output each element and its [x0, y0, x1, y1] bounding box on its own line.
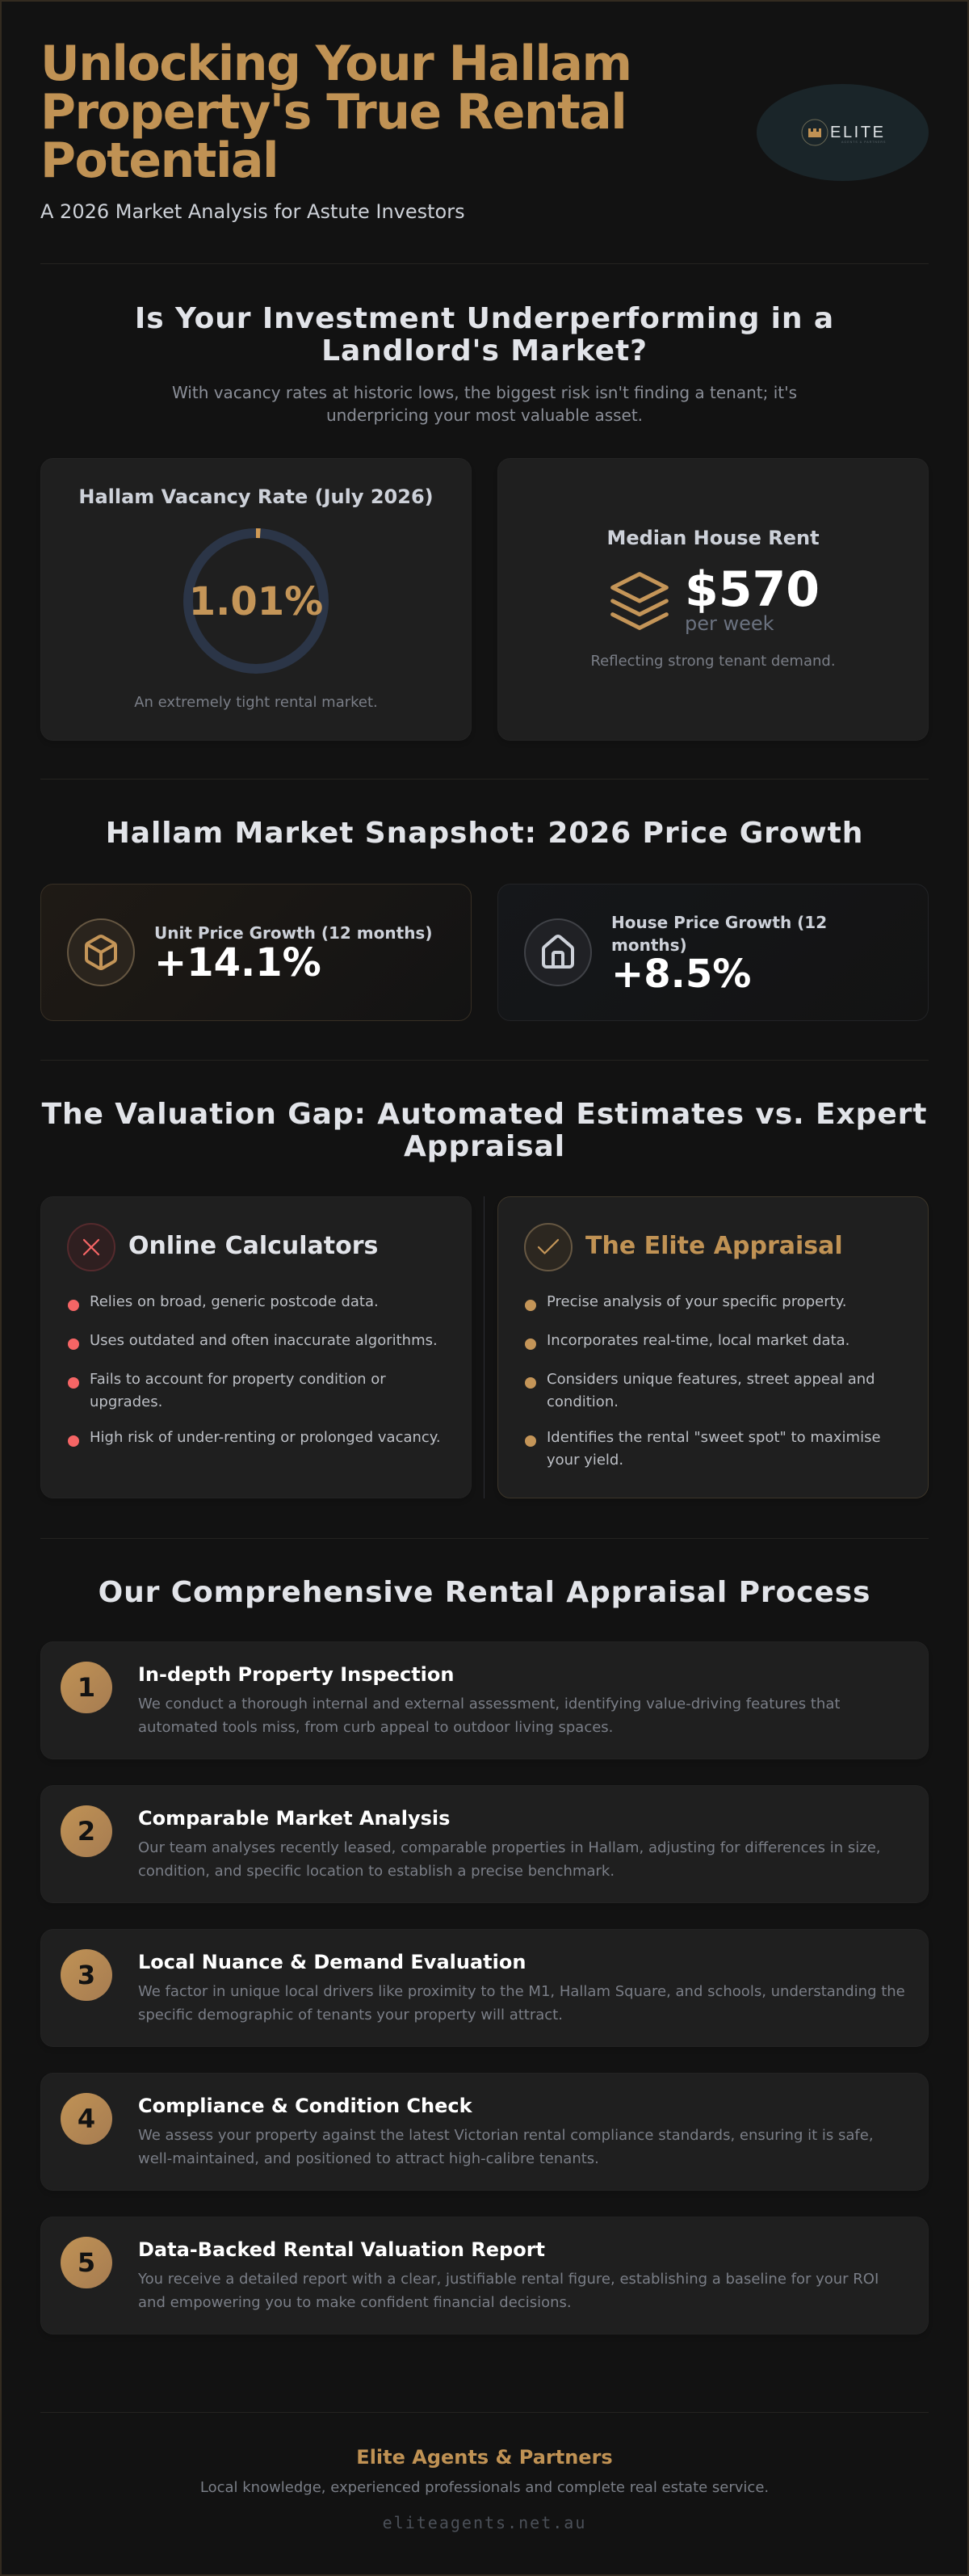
panel: online calculators: [40, 1196, 472, 1498]
icon: check: [524, 1223, 573, 1271]
step title: Compliance & Condition Check: [138, 2095, 472, 2117]
title: Potential: [40, 132, 278, 189]
appraisal heading: The Elite Appraisal: [585, 1232, 843, 1260]
appraisal list: condition.: [547, 1393, 619, 1410]
calculators heading: Online Calculators: [128, 1232, 378, 1260]
panel: house growth: [497, 884, 929, 1021]
title: Unlocking Your Hallam: [40, 36, 631, 92]
heading: valuation gap: Appraisal: [404, 1130, 565, 1163]
step description: [138, 2271, 879, 2311]
calculators list: [68, 1293, 441, 1447]
step 5: [40, 2217, 929, 2334]
logo badge: AGENTS & PARTNERS: [841, 141, 886, 144]
step description: Our team analyses recently leased, comparable properties in Hallam, adjusting for differences in size,: [138, 1839, 880, 1856]
step description: We factor in unique local drivers like proximity to the M1, Hallam Square, and schools, understanding the: [138, 1983, 905, 2000]
appraisal list: [525, 1293, 881, 1469]
unit value: +14.1%: [154, 940, 321, 985]
house label: House Price Growth (12: [611, 913, 827, 932]
step title: In-depth Property Inspection: [138, 1663, 454, 1686]
heading: underperforming: [135, 302, 834, 368]
step description: [138, 2127, 874, 2167]
appraisal list: Considers unique features, street appeal and: [547, 1371, 875, 1388]
step description: You receive a detailed report with a clear, justifiable rental figure, establishing a baseline for your ROI: [138, 2271, 879, 2288]
step title: Local Nuance & Demand Evaluation: [138, 1951, 526, 1973]
rent note: Reflecting strong tenant demand.: [590, 653, 836, 670]
icon: house: [524, 918, 592, 986]
heading: snapshot: Hallam Market Snapshot: 2026 Price Growth: [106, 817, 863, 850]
step number: [61, 2237, 112, 2288]
house label: months): [611, 935, 687, 955]
rent heading: Median House Rent: [606, 527, 820, 549]
step number: [61, 1805, 112, 1857]
step number: 5: [78, 2247, 95, 2278]
intro text: With vacancy rates at historic lows, the biggest risk isn't finding a tenant; it's: [172, 383, 797, 402]
vacancy heading: Hallam Vacancy Rate (July 2026): [78, 485, 434, 508]
step description: [138, 1696, 840, 1736]
rent unit: per week: [685, 612, 774, 635]
step description: specific demographic of tenants your property will attract.: [138, 2007, 563, 2023]
heading: process: Our Comprehensive Rental Appraisal Process: [99, 1576, 870, 1609]
step number: [61, 2093, 112, 2145]
step description: condition, and specific location to establish a precise benchmark.: [138, 1863, 615, 1880]
step 2: [40, 1785, 929, 1903]
vacancy note: An extremely tight rental market.: [134, 694, 378, 711]
house value: +8.5%: [611, 952, 751, 997]
step number: 3: [78, 1960, 95, 1990]
footer tagline: Local knowledge, experienced professionals and complete real estate service.: [200, 2479, 769, 2496]
step description: [138, 1983, 905, 2023]
step number: 1: [78, 1672, 95, 1703]
unit label: Unit Price Growth (12 months): [154, 923, 432, 943]
panel: vacancy rate: [40, 458, 472, 741]
step description: well-maintained, and positioned to attract high-calibre tenants.: [138, 2150, 599, 2167]
house label: [611, 913, 827, 955]
step number: 2: [78, 1816, 95, 1847]
icon: cross: [67, 1223, 115, 1271]
icon: box: [67, 918, 135, 986]
step title: Data-Backed Rental Valuation Report: [138, 2238, 545, 2261]
donut chart: [183, 528, 329, 674]
logo badge: ELITE: [830, 124, 886, 141]
step description: We assess your property against the latest Victorian rental compliance standards, ensuring it is safe,: [138, 2127, 874, 2144]
intro text: [172, 383, 797, 425]
calculators list: Relies on broad, generic postcode data.: [90, 1293, 379, 1310]
appraisal list: Precise analysis of your specific property.: [547, 1293, 846, 1310]
step number: [61, 1949, 112, 2001]
step 3: [40, 1929, 929, 2047]
heading: underperforming: Is Your Investment Underperforming in a: [135, 302, 834, 335]
logo badge: [757, 84, 929, 181]
step title: Comparable Market Analysis: [138, 1807, 450, 1830]
footer url: eliteagents.net.au: [383, 2513, 586, 2532]
step number: 4: [78, 2103, 95, 2134]
rent value: $570: [685, 561, 820, 618]
footer brand: Elite Agents & Partners: [356, 2446, 613, 2469]
panel: elite appraisal: [497, 1196, 929, 1498]
step description: We conduct a thorough internal and external assessment, identifying value-driving features that: [138, 1696, 840, 1712]
subtitle: A 2026 Market Analysis for Astute Investors: [40, 200, 465, 223]
panel: unit growth: [40, 884, 472, 1021]
step description: [138, 1839, 880, 1880]
appraisal list: Incorporates real-time, local market data.: [547, 1332, 849, 1349]
title: Property's True Rental: [40, 84, 626, 141]
heading: valuation gap: The Valuation Gap: Automated Estimates vs. Expert: [42, 1098, 927, 1131]
appraisal list: your yield.: [547, 1452, 623, 1469]
step description: automated tools miss, from curb appeal to outdoor living spaces.: [138, 1719, 613, 1736]
step number: [61, 1662, 112, 1713]
step 4: [40, 2073, 929, 2191]
calculators list: Uses outdated and often inaccurate algorithms.: [90, 1332, 438, 1349]
heading: underperforming: Landlord's Market?: [321, 334, 648, 368]
title: [40, 36, 631, 189]
donut chart: 1.01%: [189, 579, 323, 624]
step 1: [40, 1641, 929, 1759]
heading: valuation gap: [42, 1098, 927, 1163]
appraisal list: Identifies the rental "sweet spot" to maximise: [547, 1429, 881, 1446]
calculators list: upgrades.: [90, 1393, 162, 1410]
calculators list: Fails to account for property condition or: [90, 1371, 386, 1388]
intro text: underpricing your most valuable asset.: [326, 406, 643, 425]
calculators list: High risk of under-renting or prolonged vacancy.: [90, 1429, 441, 1446]
panel: median rent: [497, 458, 929, 741]
step description: and empowering you to make confident financial decisions.: [138, 2294, 572, 2311]
icon: layers: [610, 572, 669, 630]
